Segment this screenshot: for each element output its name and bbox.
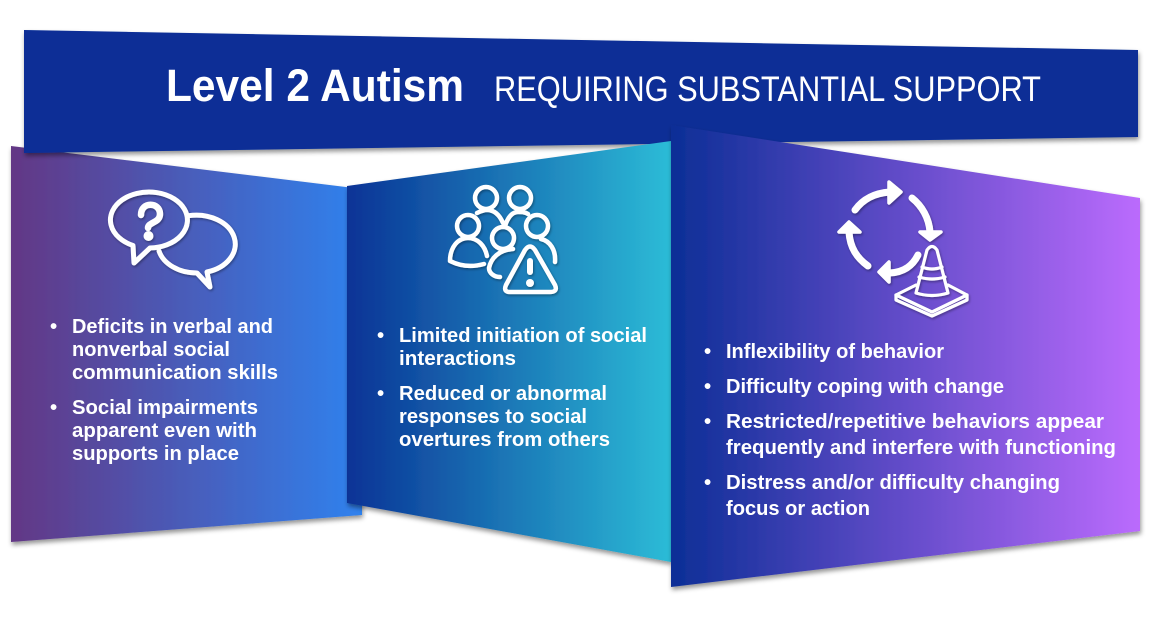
bullet list: social communication: • — [50, 315, 57, 338]
bullet list: behavior: • — [704, 375, 711, 398]
bullet list: social communication — [50, 315, 278, 465]
banner background — [24, 30, 1138, 153]
bullet list: behavior: • — [704, 471, 711, 494]
right panel background — [671, 125, 1140, 587]
bullet list: social communication: nonverbal social — [72, 338, 230, 361]
bullet list: behavior: Inflexibility of behavior — [726, 340, 944, 363]
left panel background — [11, 146, 362, 542]
bullet list: social communication: apparent even with — [72, 419, 257, 442]
bullet list: social interaction — [377, 324, 647, 451]
bullet list: social interaction: Reduced or abnormal — [399, 382, 607, 405]
bullet list: behavior: Distress and/or difficulty changing — [726, 471, 1060, 494]
bullet list: social communication: communication skills — [72, 361, 278, 384]
bullet list: behavior: • — [704, 410, 711, 433]
bullet list: behavior — [704, 340, 1116, 520]
bullet list: social interaction: responses to social — [399, 405, 587, 428]
bullet list: behavior: Restricted/repetitive behaviors appear — [726, 410, 1104, 433]
bullet list: social communication: • — [50, 396, 57, 419]
bullet list: social interaction: interactions — [399, 347, 516, 370]
bullet list: social communication: supports in place — [72, 442, 239, 465]
panel: social communication — [11, 146, 362, 542]
bullet list: social interaction: Limited initiation of social — [399, 324, 647, 347]
bullet list: social communication: Social impairments — [72, 396, 258, 419]
middle panel background — [347, 141, 671, 562]
subheading: requiring substantial support: REQUIRING SUBSTANTIAL SUPPORT — [494, 70, 1041, 109]
icon: speech bubbles with question mark — [110, 192, 235, 287]
heading: Level 2 Autism: Level 2 Autism — [166, 60, 464, 111]
bullet list: behavior: focus or action — [726, 497, 870, 520]
panel: social interaction — [347, 141, 671, 562]
bullet list: social interaction: overtures from others — [399, 428, 610, 451]
bullet list: behavior: • — [704, 340, 711, 363]
icon: group of people with warning triangle — [450, 187, 556, 292]
bullet list: social interaction: • — [377, 382, 384, 405]
panel: behavior — [671, 125, 1140, 587]
bullet list: social communication: Deficits in verbal and — [72, 315, 273, 338]
title banner — [24, 30, 1138, 153]
bullet list: social interaction: • — [377, 324, 384, 347]
icon: circular arrows with traffic cone — [839, 182, 967, 316]
bullet list: behavior: frequently and interfere with functioning — [726, 436, 1116, 459]
bullet list: behavior: Difficulty coping with change — [726, 375, 1004, 398]
